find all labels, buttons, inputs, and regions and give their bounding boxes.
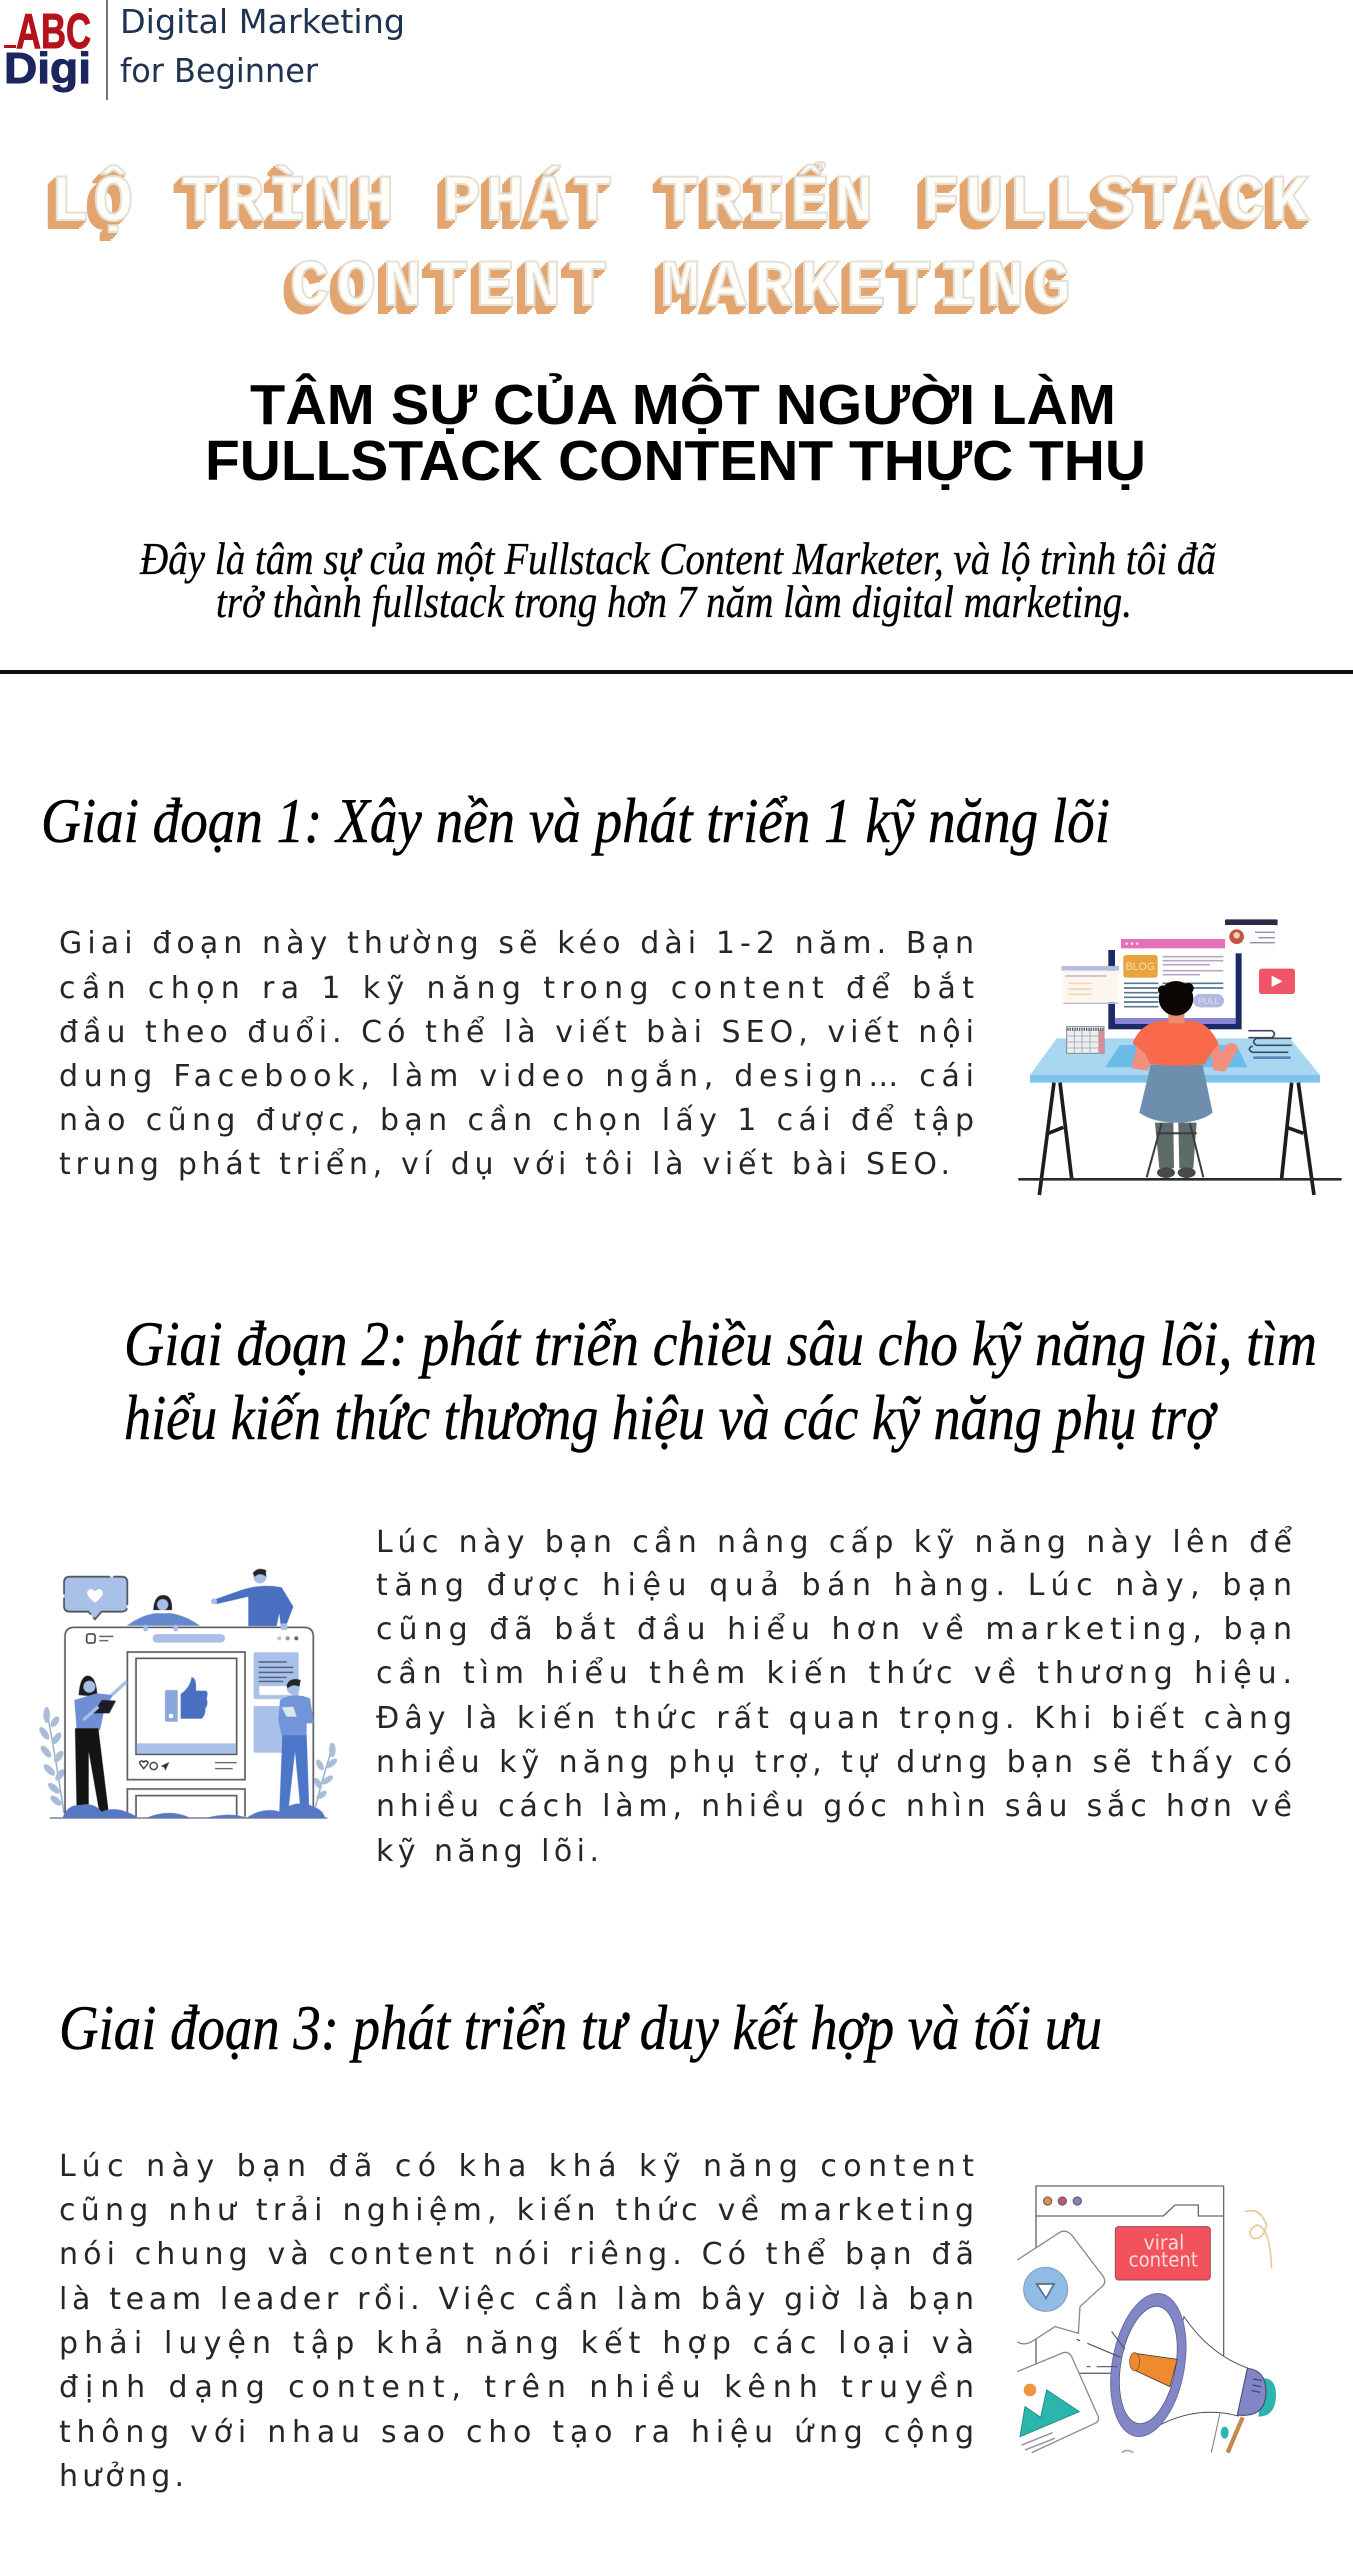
logo tagline [120,2,405,90]
text block: stage 3: phải luyện tập khả năng kết hợp các loại và [59,2326,974,2361]
subtitle: FULLSTACK CONTENT THỰC THỤ [205,429,1146,493]
text block: stage 3: là team leader rồi. Việc cần làm bây giờ là bạn [59,2282,974,2317]
viral content label: viral [1144,2230,1184,2254]
main title [50,161,1309,325]
person: top right [211,1569,293,1630]
logo: ABC Digi, Digital Marketing for Beginner [4,0,405,100]
text block: stage 2: Đây là kiến thức rất quan trọng. Khi biết càng [376,1701,1292,1736]
second post [127,1789,245,1817]
intro text: trở thành fullstack trong hơn 7 năm làm digital marketing. [216,576,1132,627]
calendar [1067,1027,1104,1053]
text block: stage 3: nói chung và content nói riêng. Có thể bạn đã [59,2236,974,2272]
text block: stage 2: nhiều cách làm, nhiều góc nhìn sâu sắc hơn về [376,1789,1292,1824]
person: woman with tablet [74,1676,127,1817]
heading: stage 2 [124,1308,1317,1453]
logo mark: ABC [16,5,91,59]
panel: stage 3 [59,1992,1276,2494]
text block: stage 3: thông với nhau sao cho tạo ra hiệu ứng cộng [59,2415,974,2450]
person [1132,981,1238,1178]
panel: stage 2 [37,1308,1317,1869]
subtitle [205,372,1146,493]
plants [37,1707,339,1813]
window frame [65,1627,313,1817]
text block: stage 3: hưởng. [59,2459,184,2494]
main title: CONTENT MARKETING [290,250,1071,325]
logo tagline: Digital Marketing [120,2,405,41]
floating note window [1062,966,1119,1003]
logo tagline: for Beginner [120,51,318,90]
table [1018,1038,1342,1195]
logo mark: Digi [4,44,91,93]
doodle [1245,2211,1272,2268]
heading: stage 3: Giai đoạn 3: phát triển tư duy kết hợp và tối ưu [59,1992,1102,2063]
megaphone [1077,2288,1276,2453]
text block: stage 1 [59,926,974,1182]
books [1248,1031,1292,1058]
floating profile window [1225,919,1278,953]
viral content label: content [1129,2248,1198,2272]
panel: stage 1 [41,785,1342,1195]
person: man with book [277,1679,314,1817]
speech bubble with heart [64,1577,127,1619]
icon: viral content megaphone [1017,2186,1276,2453]
text block: stage 3: Lúc này bạn đã có kha khá kỹ năng content [59,2149,974,2184]
header controls [87,1634,298,1643]
text block: stage 2: cần tìm hiểu thêm kiến thức về thương hiệu. [376,1655,1292,1691]
video play icon [1259,969,1295,994]
monitor: PULL [1198,996,1220,1006]
text block: stage 1: Giai đoạn này thường sẽ kéo dài 1-2 năm. Bạn [59,926,974,961]
text block: stage 2: kỹ năng lõi. [376,1834,599,1869]
text block: stage 1: nào cũng được, bạn cần chọn lấy 1 cái để tập [59,1102,974,1138]
text block: stage 2: tăng được hiệu quả bán hàng. Lúc này, bạn [376,1568,1292,1603]
browser window [1036,2186,1224,2373]
viral content label [1115,2227,1210,2280]
image card [1017,2352,1099,2453]
text block: stage 1: cần chọn ra 1 kỹ năng trong content để bắt [59,970,974,1006]
heading: stage 1: Giai đoạn 1: Xây nền và phát triển 1 kỹ năng lõi [41,785,1110,856]
ground mounds [50,1803,327,1818]
icon: social media team with like [37,1569,339,1818]
subtitle: TÂM SỰ CỦA MỘT NGƯỜI LÀM [250,372,1116,437]
text block: stage 3: cũng như trải nghiệm, kiến thức về marketing [59,2193,974,2228]
monitor: BLOG [1126,961,1155,973]
side panels [254,1652,299,1753]
text block: stage 1: đầu theo đuổi. Có thể là viết bài SEO, viết nội [59,1014,974,1050]
logo mark [4,5,91,93]
monitor [1108,939,1242,1029]
icon: person working at desk [1018,919,1342,1195]
main title: LỘ TRÌNH PHÁT TRIỂN FULLSTACK [50,161,1309,240]
text block: stage 1: trung phát triển, ví dụ với tôi là viết bài SEO. [59,1146,950,1182]
text block: stage 3: định dạng content, trên nhiều kênh truyền [59,2370,974,2405]
like post [127,1652,245,1780]
play bubble [1017,2231,1105,2344]
intro text [139,533,1216,627]
text block: stage 3 [59,2149,974,2494]
text block: stage 2: nhiều kỹ năng phụ trợ, tự dưng bạn sẽ thấy có [376,1745,1292,1780]
text block: stage 1: dung Facebook, làm video ngắn, design… cái [59,1059,974,1094]
person: top centre [127,1595,200,1631]
text block: stage 2: cũng đã bắt đầu hiểu hơn về marketing, bạn [376,1611,1292,1647]
text block: stage 2: Lúc này bạn cần nâng cấp kỹ năng này lên để [376,1524,1293,1560]
text block: stage 2 [376,1524,1293,1869]
